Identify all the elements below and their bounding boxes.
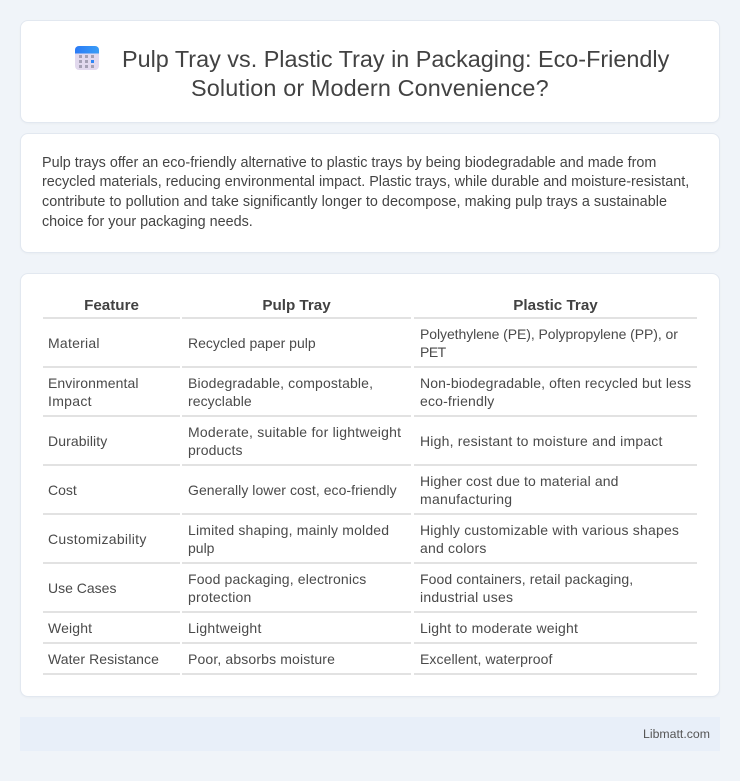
row: Cost: manufacturing [420,491,512,507]
row: Environmental Impact: Non-biodegradable, often recycled but less [420,375,691,391]
row: Cost: Higher cost due to material and [420,473,619,489]
row: Durability: products [188,442,243,458]
row: Use Cases: industrial uses [420,589,513,605]
row: Weight: Light to moderate weight [420,620,578,636]
row: Customizability: pulp [188,540,214,556]
row: Weight [43,620,697,644]
row: Water Resistance: Excellent, waterproof [420,651,552,667]
row: Customizability: Customizability [48,531,147,547]
intro paragraph: Pulp trays offer an eco-friendly alternative to plastic trays by being biodegradable and made from [42,155,656,171]
row: Environmental Impact: recyclable [188,393,252,409]
footer text: Libmatt.com [643,727,710,741]
row: Environmental Impact: eco-friendly [420,393,494,409]
row: Water Resistance [43,651,697,675]
row: Use Cases: Use Cases [48,580,116,596]
table header: Feature [84,297,139,314]
footer bar [20,717,720,751]
row: Water Resistance: Poor, absorbs moisture [188,651,335,667]
row: Environmental Impact: Environmental [48,375,139,391]
row: Material: Polyethylene (PE), Polypropylene (PP), or [420,326,678,342]
row: Material [43,326,697,368]
row: Durability: Durability [48,433,107,449]
row: Durability [43,424,697,466]
row: Weight: Lightweight [188,620,262,636]
title: Solution or Modern Convenience? [191,75,549,101]
table header [43,297,697,319]
row: Use Cases: Food containers, retail packaging, [420,571,633,587]
table card [20,273,720,697]
title [122,46,670,101]
row: Material: PET [420,344,446,360]
row: Cost: Generally lower cost, eco-friendly [188,482,397,498]
row: Customizability [43,522,697,564]
intro paragraph: contribute to pollution and take significantly longer to decompose, making pulp trays a sustainable [42,194,667,210]
icon: calendar [75,46,99,70]
table header: Pulp Tray [262,297,331,314]
title: Pulp Tray vs. Plastic Tray in Packaging: Eco-Friendly [122,46,669,72]
row: Material: Material [48,335,100,351]
row: Weight: Weight [48,620,92,636]
intro paragraph: recycled materials, reducing environmental impact. Plastic trays, while durable and moisture-resistant, [42,174,689,190]
row: Customizability: Limited shaping, mainly molded [188,522,389,538]
row: Use Cases: protection [188,589,251,605]
row: Durability: Moderate, suitable for lightweight [188,424,401,440]
row: Customizability: Highly customizable with various shapes [420,522,679,538]
title card [20,20,720,123]
row: Use Cases [43,571,697,613]
intro paragraph [42,155,689,230]
row: Cost [43,473,697,515]
row: Environmental Impact: Impact [48,393,92,409]
intro card [20,133,720,253]
row: Durability: High, resistant to moisture and impact [420,433,663,449]
row: Cost: Cost [48,482,77,498]
intro paragraph: choice for your packaging needs. [42,214,253,230]
row: Use Cases: Food packaging, electronics [188,571,366,587]
row: Water Resistance: Water Resistance [48,651,159,667]
row: Customizability: and colors [420,540,487,556]
row: Environmental Impact: Biodegradable, compostable, [188,375,373,391]
row: Material: Recycled paper pulp [188,335,316,351]
row: Environmental Impact [43,375,697,417]
table header: Plastic Tray [513,297,598,314]
